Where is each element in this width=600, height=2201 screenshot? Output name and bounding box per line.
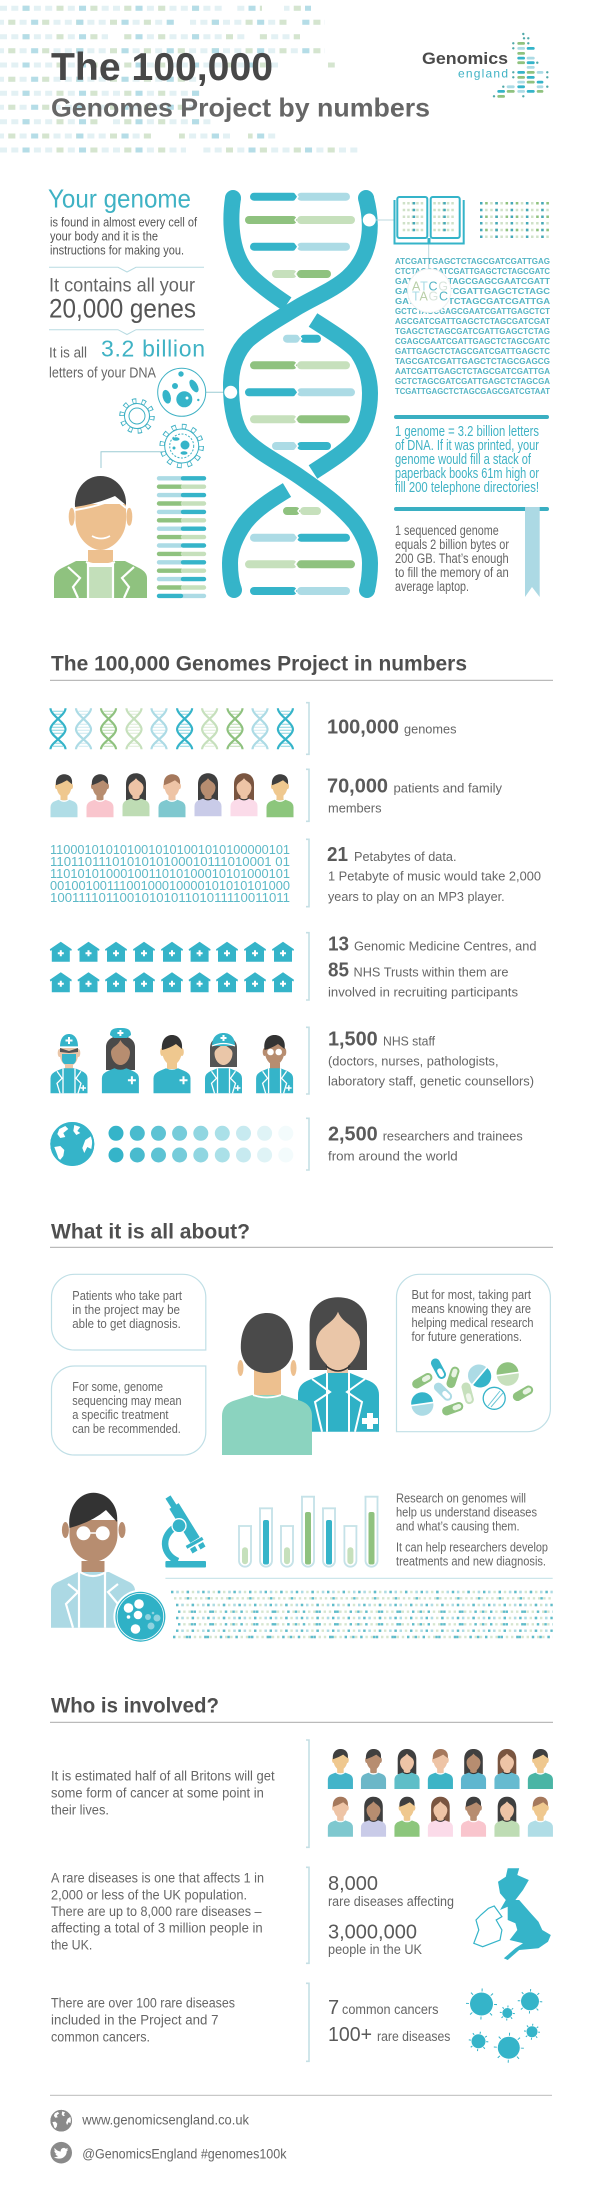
icon: person with green jacket [54, 476, 147, 598]
text block: DNA letters: TAGCGATCGATTGAGCTCTAGCGAGCG [395, 356, 550, 366]
text: rare diseases definition: the UK. [51, 1937, 92, 1952]
callout: printed genome size: genome would fill a stack of [395, 452, 532, 468]
heading: who is involved: Who is involved? [51, 1695, 219, 1718]
magnifier: ATCG TAGC [408, 269, 451, 312]
text: 21 petabytes: 21 [327, 844, 348, 866]
text: half of Britons: It is estimated half of all Britons will get [51, 1769, 275, 1784]
text: 1,500 staff [328, 1029, 534, 1089]
icon: disease cells [468, 1990, 541, 2061]
row: binary data block [50, 842, 290, 905]
text block: DNA letters: CTCTAGCGATCGATTGAGCTCTAGCGATC [395, 266, 550, 276]
header: pixel band background [0, 4, 358, 154]
logo: Genomics England [422, 33, 548, 98]
text: 13 centres, 85 trusts: involved in recruiting participants [328, 985, 518, 1000]
magnifier: ATCG TAGC: TAGC [412, 290, 448, 304]
text: 70,000 patients [327, 776, 502, 816]
callout: printed genome size [394, 415, 549, 511]
text: 3.2 billion letters: 3.2 billion [101, 336, 205, 362]
text: 21 petabytes: 1 Petabyte of music would take 2,000 [328, 869, 541, 884]
text: 7 common cancers, 100+ rare diseases: rare diseases [377, 2029, 451, 2044]
staff: doctor with mask [50, 1034, 88, 1093]
title: Genomes Project by numbers [51, 93, 430, 123]
text block: DNA letters: GATCGATTCTAGCGAGCGAATCGATT [395, 276, 551, 286]
text: half of Britons: some form of cancer at some point in [51, 1786, 264, 1801]
speech box: medical research with pills: helping medical research [412, 1315, 534, 1330]
text: genome intro: your body and it is the [50, 229, 158, 244]
heading: your genome: Your genome [48, 183, 191, 213]
text: sequenced genome size [395, 523, 509, 594]
icon: web globe [50, 2110, 72, 2131]
text block: DNA letters: CGAGCGAATCGATTGAGCTCTAGCGATC [395, 336, 550, 346]
heading: in numbers: The 100,000 Genomes Project in numbers [51, 653, 467, 676]
text: genome intro [50, 215, 197, 258]
text: 70,000 patients: members [328, 801, 382, 816]
text: 1,500 staff: 1,500 [328, 1029, 378, 1051]
text: 70,000 patients: 70,000 [327, 776, 388, 798]
text: research on genomes: and what’s causing them. [396, 1519, 520, 1534]
logo: Genomics England: england [458, 67, 508, 81]
speech box: treatment [52, 1366, 206, 1455]
icon: dot matrix [480, 203, 550, 237]
people grid: half of population [328, 1749, 553, 1837]
staff: male scrubs [154, 1035, 190, 1093]
text: 8,000 rare diseases, 3,000,000 people: rare diseases affecting [328, 1894, 454, 1909]
text: 8,000 rare diseases, 3,000,000 people: 3,000,000 [328, 1921, 417, 1943]
text block: DNA letters: GATTGAGCTCTAGCGATCGATTGAGCTC [395, 346, 550, 356]
text: 20,000 genes: It contains all your [49, 276, 196, 297]
text: 1,500 staff: laboratory staff, genetic counsellors) [328, 1074, 534, 1089]
text block: DNA letters: AATCGATTGAGCTCTAGCGATCGATTGA [395, 366, 550, 376]
icon: UK map [474, 1868, 551, 1960]
text block: DNA letters: GCTCTAGCGATCGATTGAGCTCTAGCGA [395, 376, 550, 386]
text: 21 petabytes [327, 844, 541, 904]
text: 2,500 researchers: researchers and trainees [383, 1129, 523, 1144]
text: twitter handle: @GenomicsEngland #genomes100k [82, 2146, 287, 2161]
text: 100,000 genomes: 100,000 [327, 716, 399, 738]
speech box: diagnosis: Patients who take part [72, 1288, 182, 1303]
text: over 100 rare diseases [51, 1996, 235, 2045]
speech box: treatment: sequencing may mean [72, 1393, 182, 1408]
text: sequenced genome size: to fill the memory of an [395, 565, 509, 580]
staff: female doctor with cap [205, 1033, 242, 1093]
text: 2,500 researchers: 2,500 [328, 1124, 378, 1146]
icon: stack of base pairs [159, 478, 204, 596]
text: genome intro: is found in almost every cell of [50, 215, 197, 230]
speech box: treatment: For some, genome [72, 1379, 163, 1394]
text: 100,000 genomes: genomes [404, 721, 457, 736]
speech box: medical research with pills: means knowing they are [412, 1301, 531, 1316]
text: sequenced genome size: average laptop. [395, 579, 469, 594]
text: 21 petabytes: Petabytes of data. [354, 849, 456, 864]
text: 2,500 researchers [328, 1124, 523, 1164]
speech box: medical research with pills [396, 1274, 550, 1432]
text: 7 common cancers, 100+ rare diseases: common cancers [342, 2002, 439, 2017]
text: over 100 rare diseases: included in the Project and 7 [51, 2013, 218, 2028]
icon: open book [376, 197, 464, 270]
text: 13 centres, 85 trusts: 13 [328, 934, 349, 956]
row: researchers dots [108, 1126, 293, 1162]
text block: DNA letters: AGCGATCGATTGAGCTCTAGCGATCGAT [395, 316, 551, 326]
text: sequenced genome size: 1 sequenced genome [395, 523, 499, 538]
text: half of Britons: their lives. [51, 1803, 109, 1818]
text: rare diseases definition: affecting a total of 3 million people in [51, 1921, 263, 1936]
text: research on genomes: treatments and new diagnosis. [396, 1554, 546, 1569]
text: 100,000 genomes [327, 716, 457, 738]
speech box: medical research with pills: But for most, taking part [412, 1287, 531, 1302]
text: 20,000 genes: 20,000 genes [49, 293, 196, 323]
text: 7 common cancers, 100+ rare diseases: 7 [328, 1997, 339, 2019]
text: half of Britons [51, 1769, 275, 1818]
row: 70,000 patients icons [50, 773, 294, 817]
title: The 100,000 [51, 46, 273, 89]
text: 13 centres, 85 trusts [328, 934, 536, 1000]
text: 20,000 genes [49, 276, 196, 323]
title [51, 46, 430, 123]
text: 8,000 rare diseases, 3,000,000 people [328, 1873, 454, 1957]
icon: large gear with cell [101, 426, 201, 468]
speech box: medical research with pills: for future generations. [412, 1329, 522, 1344]
illustration: doctor [298, 1297, 379, 1432]
row: 100,000 genomes icons [50, 708, 293, 749]
row: binary data block: 1101010100010011010100010101000101 [50, 866, 290, 881]
panel: your genome text [48, 183, 205, 381]
text: 3.2 billion letters: letters of your DNA [49, 364, 156, 381]
chart: DNA double helix [224, 190, 376, 598]
speech box: diagnosis: in the project may be [72, 1302, 180, 1317]
text: sequenced genome size: equals 2 billion bytes or [395, 537, 509, 552]
heading: what it is all about: What it is all about? [51, 1220, 250, 1243]
speech box: diagnosis: able to get diagnosis. [72, 1316, 181, 1331]
illustration: researcher with petri dish [51, 1493, 167, 1644]
icon: microscope [165, 1497, 206, 1568]
staff: male doctor with glasses [256, 1035, 293, 1093]
text: 3.2 billion letters: It is all [49, 344, 87, 361]
text: research on genomes: It can help researchers develop [396, 1540, 548, 1555]
text block: DNA letters: GCTCTAGCGAGCGAATCGATTGAGCTCT [395, 306, 551, 316]
text: 3.2 billion letters [49, 336, 205, 381]
text: 2,500 researchers: from around the world [328, 1149, 458, 1164]
speech box: diagnosis [52, 1274, 206, 1350]
text: over 100 rare diseases: common cancers. [51, 2030, 150, 2045]
speech box: treatment: a specific treatment [72, 1407, 169, 1422]
row: NHS staff icons [50, 1028, 293, 1093]
speech box: treatment: can be recommended. [72, 1421, 181, 1436]
text: 13 centres, 85 trusts: Genomic Medicine Centres, and [354, 939, 536, 954]
text: over 100 rare diseases: There are over 100 rare diseases [51, 1996, 235, 2011]
icon: test tubes [238, 1497, 378, 1567]
text: 13 centres, 85 trusts: 85 [328, 960, 349, 982]
text: website: www.genomicsengland.co.uk [81, 2113, 249, 2128]
text: sequenced genome size: 200 GB. That’s enough [395, 551, 509, 566]
icon: cell [158, 368, 224, 416]
illustration: patient from behind [222, 1313, 312, 1455]
text: 7 common cancers, 100+ rare diseases: 100+ [328, 2024, 372, 2046]
callout: printed genome size: fill 200 telephone directories! [395, 480, 539, 496]
icon: twitter [50, 2142, 72, 2164]
magnifier: ATCG TAGC: ATCG [412, 280, 448, 294]
text block: DNA letters [395, 256, 551, 396]
row: binary data block: 0010010011100100010000101010101000 [50, 878, 290, 893]
icon: globe [50, 1122, 94, 1166]
text: rare diseases definition: A rare diseases is one that affects 1 in [51, 1871, 264, 1886]
text block: DNA letters: TCGATTGAGCTCTAGCGAGCGATCGTAAT [395, 386, 551, 396]
dot matrix band [171, 1592, 553, 1637]
text: 1,500 staff: NHS staff [383, 1034, 435, 1049]
text: rare diseases definition: 2,000 or less of the UK population. [51, 1887, 247, 1902]
callout: printed genome size: paperback books 61m high or [395, 466, 539, 482]
text block: DNA letters: TGAGCTCTAGCGATCGATTGAGCTCTAG [395, 326, 550, 336]
text block: DNA letters: GATTGAGATCGATTGAGCTCTAGC [395, 286, 550, 296]
text block: DNA letters: ATCGATTGAGCTCTAGCGATCGATTGAG [395, 256, 550, 266]
row: binary data block: 1100010101010010101001010100000101 [50, 842, 290, 857]
row: genomic medicine centres icons [50, 942, 294, 992]
row: binary data block: 1001111011001010101101011110011011 [50, 890, 290, 905]
callout: printed genome size: 1 genome = 3.2 billion letters [395, 424, 539, 440]
text: 8,000 rare diseases, 3,000,000 people: people in the UK [328, 1942, 422, 1957]
callout: printed genome size: of DNA. If it was printed, your [395, 438, 539, 454]
text: 70,000 patients: patients and family [394, 781, 502, 796]
row: binary data block: 1101101110101010100010111010001 01 [50, 854, 290, 869]
text: genome intro: instructions for making you. [50, 243, 184, 258]
staff: nurse [102, 1028, 139, 1093]
logo: Genomics England: Genomics [422, 49, 508, 68]
icon: small gear [122, 401, 152, 431]
text block: DNA letters: GATCGAGCTCTAGCGATCGATTGA [395, 296, 550, 306]
text: 8,000 rare diseases, 3,000,000 people: 8,000 [328, 1873, 378, 1895]
text: research on genomes: Research on genomes will [396, 1491, 526, 1506]
text: 7 common cancers, 100+ rare diseases [328, 1997, 451, 2046]
text: 21 petabytes: years to play on an MP3 player. [328, 889, 505, 904]
text: rare diseases definition: There are up to 8,000 rare diseases – [51, 1904, 262, 1919]
icon: bookmark [525, 507, 540, 597]
text: research on genomes [396, 1491, 548, 1569]
text: rare diseases definition [51, 1871, 264, 1952]
text: 13 centres, 85 trusts: NHS Trusts within them are [354, 965, 508, 980]
icon: pills [410, 1357, 535, 1417]
text: research on genomes: help us understand diseases [396, 1505, 537, 1520]
text: 1,500 staff: (doctors, nurses, pathologists, [328, 1054, 498, 1069]
